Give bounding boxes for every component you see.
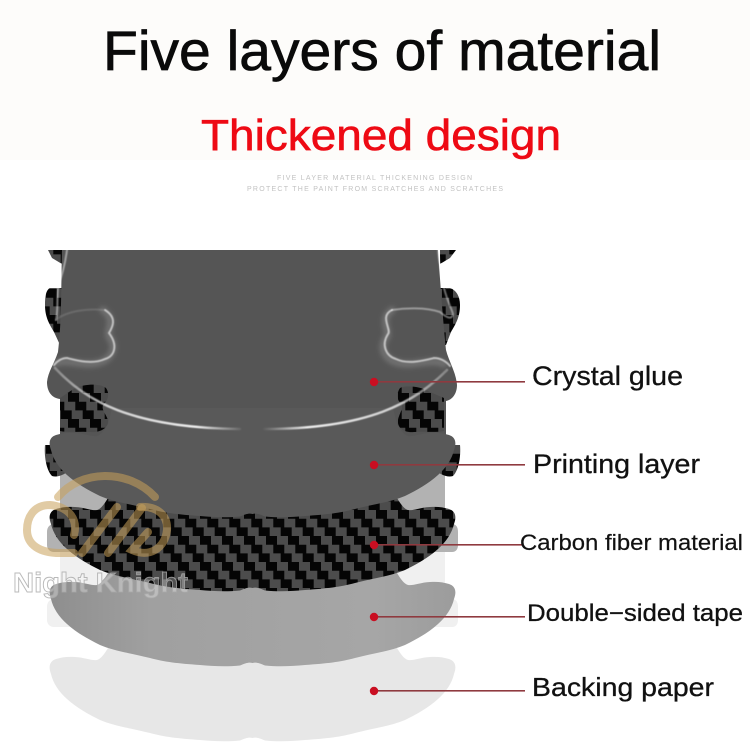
layer: printing layer: [50, 408, 455, 517]
layer: crystal glue: [47, 250, 457, 517]
small caption: PROTECT THE PAINT FROM SCRATCHES AND SCRATCHES: [247, 186, 503, 193]
watermark: Night Knight logo: [27, 476, 167, 553]
callout: backing paper: Backing paper: [532, 672, 714, 702]
layer: backing paper: [47, 547, 458, 741]
small caption: [247, 175, 503, 193]
callout: crystal glue: Crystal glue: [532, 361, 683, 391]
small caption: FIVE LAYER MATERIAL THICKENING DESIGN: [277, 175, 472, 182]
callout: double-sided tape: Double−sided tape: [527, 600, 743, 627]
title: Five layers of material: [103, 19, 661, 82]
callout: printing layer: [370, 449, 700, 479]
callout: printing layer: Printing layer: [533, 449, 700, 479]
subtitle: thickened design: Thickened design: [201, 111, 561, 160]
glue highlights: [54, 250, 453, 429]
callout: double-sided tape: [370, 600, 743, 627]
carbon fiber showing through glue: [60, 385, 444, 432]
callout: carbon fiber material: [370, 530, 743, 555]
layer: double-sided tape: [47, 472, 458, 666]
callout: backing paper: [370, 672, 714, 702]
watermark: Night Knight text: Night Knight: [13, 567, 188, 598]
carbon fiber side patches: [45, 250, 460, 477]
callout: crystal glue: [370, 361, 683, 391]
layer: carbon fiber material: [50, 482, 455, 591]
callout: carbon fiber material: Carbon fiber material: [520, 530, 743, 555]
